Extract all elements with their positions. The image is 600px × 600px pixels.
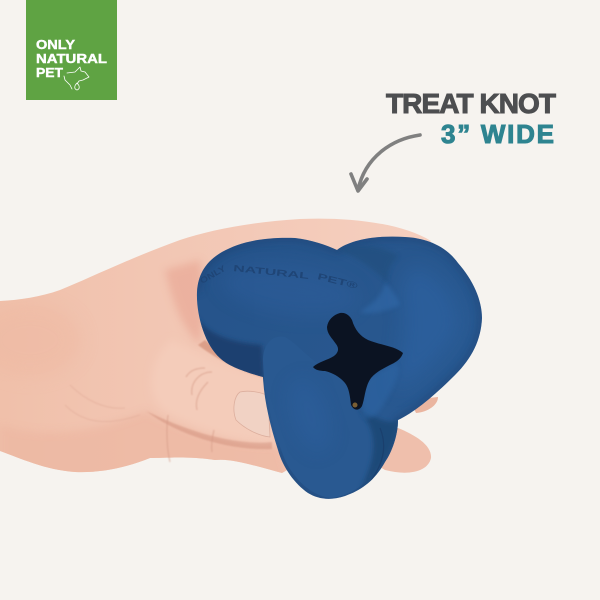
subheading: 3 inches wide: 3” WIDE — [441, 119, 554, 149]
lower lobe — [263, 350, 360, 498]
right small finger behind toy — [410, 397, 438, 413]
embossed brand text: NATURAL — [233, 263, 310, 281]
wrist flush — [0, 305, 80, 375]
logo wordmark: ONLY — [36, 37, 75, 52]
arrow pointing to toy — [351, 135, 420, 191]
thumb shadow under — [146, 411, 272, 449]
infographic canvas — [0, 0, 556, 499]
palm creases — [65, 385, 140, 422]
logo wordmark — [36, 37, 107, 80]
logo badge — [26, 0, 117, 100]
lower finger — [360, 425, 431, 473]
cross-side ridge lower right — [362, 366, 396, 418]
thumb — [152, 340, 271, 440]
embossed brand text — [198, 263, 359, 291]
hand shading group — [0, 260, 290, 480]
heading: treat knot: TREAT KNOT — [386, 88, 556, 119]
thumbnail — [234, 391, 270, 437]
under-band dark — [196, 315, 264, 380]
lower crease right — [368, 428, 384, 483]
toy: blue treat knot — [196, 237, 482, 499]
cross opening — [313, 313, 403, 410]
hand body — [0, 219, 431, 473]
inner treat glimpse — [352, 402, 358, 408]
lower palm shade — [0, 414, 287, 473]
knuckle creases — [167, 368, 214, 462]
toy shading group — [196, 237, 482, 499]
lobe inner light — [281, 373, 339, 457]
rim shadow — [197, 237, 482, 499]
embossed brand text: ONLY — [198, 263, 228, 286]
logo wordmark: NATURAL — [36, 51, 107, 66]
icon: dog and cat outline — [64, 67, 89, 90]
lower lobe right dark side — [362, 414, 398, 488]
logo wordmark: PET — [36, 65, 63, 80]
right loop light — [405, 276, 450, 372]
photo: hand holding toy — [0, 219, 482, 499]
top band light — [217, 256, 363, 324]
band end highlight — [364, 286, 398, 313]
fold at right loop — [349, 248, 395, 277]
upper palm flush — [165, 260, 205, 345]
web shadow above thumb — [198, 340, 264, 378]
toy silhouette — [197, 237, 482, 499]
hand — [0, 219, 438, 480]
embossed brand text: PET® — [317, 271, 359, 291]
